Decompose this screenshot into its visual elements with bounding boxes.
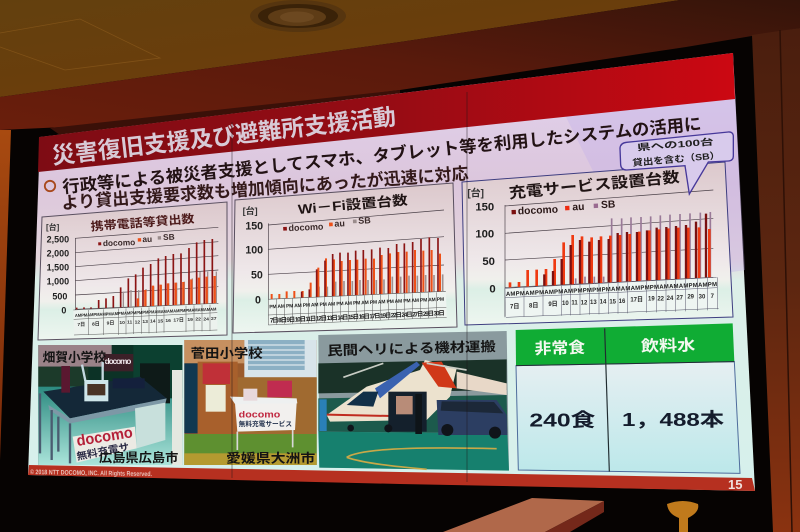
location label: 広島県広島市	[99, 450, 179, 465]
bars: docomo	[544, 214, 706, 286]
location label: 菅田小学校	[191, 345, 263, 360]
y axis labels: 2,500	[47, 235, 69, 245]
x axis table: 30	[699, 294, 706, 300]
legend: au	[142, 234, 152, 244]
x axis table: 12	[135, 319, 140, 325]
y axis labels: 2,000	[47, 249, 69, 259]
x axis table: 27	[676, 296, 684, 302]
y axis labels: 1,500	[47, 263, 69, 273]
x axis table	[73, 303, 217, 335]
x axis table: 11	[571, 301, 578, 307]
x axis table: 17日	[173, 318, 184, 324]
x axis table: AMPMAMPMAMPMAMPMAMPMPMPMPMAMAMAMAMPMPMAMAMAMAM	[75, 307, 217, 318]
footer band	[28, 465, 755, 491]
unit label: [台]	[243, 205, 258, 216]
y axis labels: 100	[475, 228, 494, 240]
bars: SB	[319, 274, 443, 297]
photo logo: docomo	[75, 424, 134, 450]
photo: Sugeta elementary school	[184, 340, 317, 466]
table body	[516, 362, 740, 473]
legend: SB	[163, 232, 175, 242]
x axis table: 13	[590, 300, 597, 306]
photo: helicopter	[318, 331, 509, 471]
y axis labels: 0	[255, 294, 261, 306]
x axis table: 7日	[510, 303, 519, 310]
x axis table: 10	[119, 320, 125, 326]
y axis labels: 50	[482, 256, 495, 268]
legend: au	[334, 218, 345, 229]
table header	[516, 323, 734, 366]
x axis table: 16	[165, 318, 171, 324]
x axis table: 9日	[548, 301, 558, 308]
photo: Hataka elementary school: 無料充電サ	[75, 440, 130, 463]
x axis table: 9日	[107, 321, 114, 327]
legend: docomo	[288, 222, 324, 233]
foreground lamp	[667, 501, 698, 532]
legend: SB	[601, 199, 616, 211]
panel: Wi-Fi chart	[233, 183, 457, 333]
location label: 民間ヘリによる機材運搬	[327, 338, 497, 358]
bars: SB	[576, 212, 710, 284]
x axis table: 24	[667, 296, 674, 302]
foreground table	[443, 498, 604, 532]
x axis table: 15	[158, 318, 163, 324]
x axis table: 7日 8日 9日 10日 11日 12日 13日 14日 15日 16日 17日 19日 22日 24日 27日 29日 30日	[270, 309, 445, 325]
x axis table: 22	[195, 317, 201, 323]
x axis table: 29	[687, 295, 695, 301]
photo logo: docomo	[239, 409, 281, 419]
copyright: © 2018 NTT DOCOMO, INC. All Rights Reserved.	[30, 468, 152, 478]
bullet text: 行政等による被災者支援としてスマホ、タブレット等を利用したシステムの活用に	[61, 113, 702, 197]
legend	[283, 215, 372, 233]
page number: 15	[728, 477, 742, 492]
title band	[38, 53, 735, 172]
photo: Hataka elementary school	[38, 345, 182, 465]
chart title: Wi-Fi: Wi－Fi設置台数	[297, 191, 409, 217]
bullet text: より貸出支援要求数も増加傾向にあったが迅速に対応	[61, 163, 469, 213]
x axis table	[505, 277, 719, 317]
header: drinking water: 飲料水	[641, 336, 696, 356]
x axis table: 7	[711, 294, 715, 300]
x axis table: 11	[127, 320, 132, 326]
x axis table: 24	[203, 316, 209, 322]
chart title: charging: 充電サービス設置台数	[508, 168, 680, 202]
gridlines	[505, 190, 713, 317]
x axis table	[268, 291, 447, 325]
legend	[511, 199, 616, 218]
slide title: 災害復旧支援及び避難所支援活動	[51, 103, 397, 169]
panel: charging service chart	[462, 132, 733, 325]
x axis table: 14	[150, 319, 156, 325]
bars: docomo	[77, 239, 212, 309]
x axis table: 17日	[630, 297, 643, 304]
y axis labels: 150	[475, 202, 494, 214]
gridlines	[75, 227, 218, 335]
bars: au	[272, 250, 440, 299]
bars: SB	[123, 272, 216, 307]
location label: 畑賀小学校	[43, 350, 106, 365]
photo: Hataka elementary school: docomo	[105, 356, 131, 366]
ceiling vent	[250, 0, 346, 32]
y axis labels	[245, 220, 263, 306]
x axis table: 8日	[92, 321, 100, 327]
legend: au	[572, 202, 585, 213]
legend: SB	[358, 215, 371, 226]
x axis table: 7日	[77, 322, 85, 328]
y axis labels: 0	[61, 305, 66, 315]
x axis table: 10	[562, 301, 569, 307]
legend: docomo	[103, 237, 135, 248]
y axis labels: 1,000	[47, 277, 69, 287]
gridlines	[268, 210, 445, 320]
x axis table: 13	[142, 319, 148, 325]
bars: docomo	[302, 237, 438, 298]
y axis labels	[47, 235, 69, 315]
callout: 県への100台	[637, 136, 714, 153]
y axis labels	[475, 202, 496, 295]
value: drinking water: 1，488本	[622, 409, 724, 430]
x axis table: 14	[600, 300, 607, 306]
callout	[620, 132, 733, 194]
y axis labels: 150	[245, 220, 263, 232]
y axis labels: 500	[52, 291, 67, 301]
x axis table: 8日	[529, 302, 538, 309]
header: emergency food: 非常食	[534, 338, 586, 358]
unit label: [台]	[467, 187, 484, 200]
unit label: [台]	[46, 222, 60, 232]
legend	[98, 232, 175, 248]
chart title: phones: 携帯電話等貸出数	[90, 212, 195, 234]
x axis table: 27	[211, 316, 217, 322]
supplies table	[516, 323, 740, 473]
x axis table: 19	[187, 317, 193, 323]
panel: phone loans chart	[38, 202, 227, 340]
bars: au	[138, 276, 215, 307]
value: emergency food: 240食	[529, 410, 596, 431]
y axis labels: 50	[251, 270, 263, 282]
photo: Sugeta elementary school: 無料充電サービス	[239, 419, 292, 428]
callout: 貸出を含む（SB）	[632, 149, 721, 168]
x axis table: 16	[619, 299, 626, 305]
x axis table: 12	[581, 300, 588, 306]
slide	[28, 53, 755, 492]
bars: au	[510, 227, 709, 287]
x axis table: 15	[609, 299, 617, 305]
y axis labels: 0	[489, 283, 496, 295]
y axis labels: 100	[245, 245, 263, 257]
location label: 愛媛県大洲市	[226, 451, 316, 466]
x axis table: 19	[648, 297, 655, 303]
x axis table: 22	[657, 296, 665, 302]
legend: docomo	[518, 205, 558, 217]
x axis table: AMPMAMPMAMPMAMPMPMPMPMAMAMAMPMPMAMAMAMPMAMPM	[506, 282, 717, 298]
x axis table: PM AM PM AM PM AM PM AM PM AM PM AM PM AM PM AM PM AM PM AM PM	[269, 297, 444, 310]
